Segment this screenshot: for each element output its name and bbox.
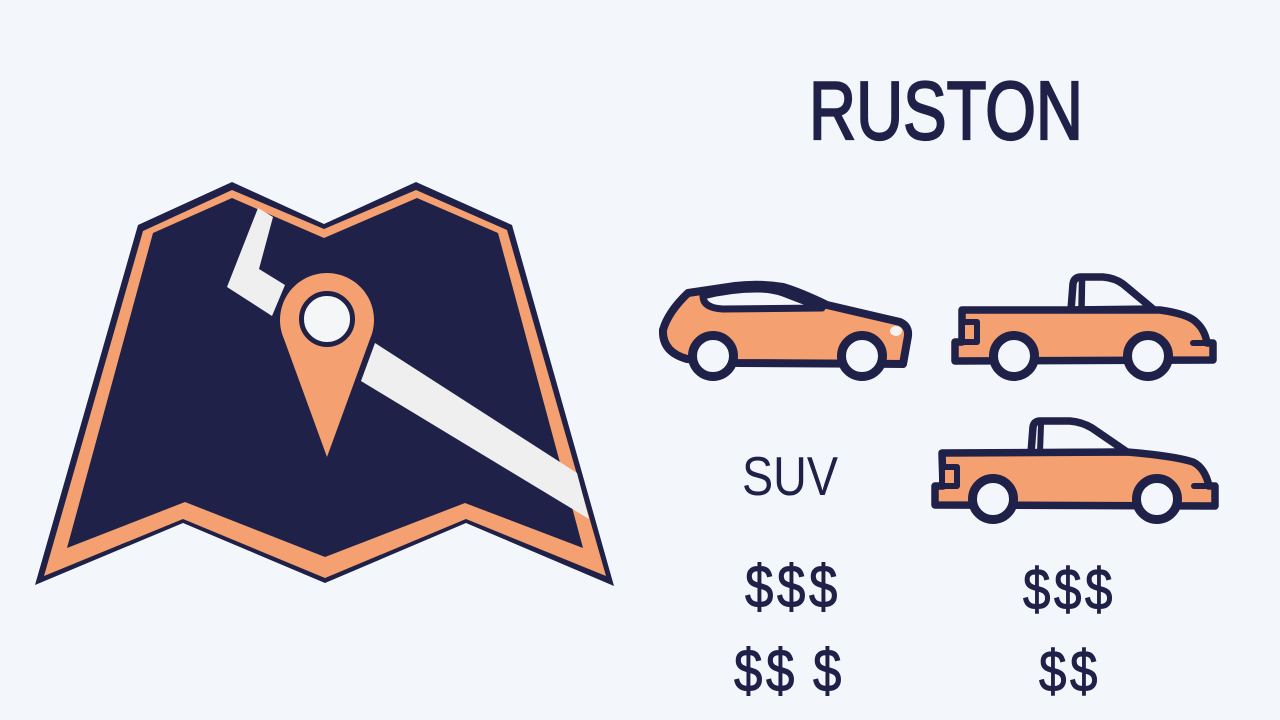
pickup tail light [962,322,977,342]
icon: pickup truck lower [935,421,1215,520]
price: left row one: $$$ [745,553,837,620]
pickup cab pillar [1078,281,1085,309]
title: RUSTON [809,64,1083,157]
map outer outline [35,182,614,586]
pin hole [302,294,352,344]
price: right row one: $$$ [1023,557,1113,622]
map orange border [44,190,606,578]
price: right row two: $$ [1039,639,1098,704]
car rear wheel [692,336,734,376]
road lower segment [361,343,589,519]
pickup rear wheel [994,336,1034,376]
SUV label: SUV [742,445,838,507]
pickup rear wheel [972,478,1014,520]
pickup cab window [1031,421,1127,453]
icon: pickup truck upper [955,277,1213,376]
pickup body [935,452,1215,506]
map illustration [35,182,614,586]
car headlight [890,326,902,336]
icon: location pin [280,273,374,457]
road upper segment [227,208,285,316]
pin body [280,273,374,457]
pickup front wheel [1128,336,1168,376]
car window [703,289,822,309]
car front wheel [842,336,882,376]
pickup front wheel [1136,478,1178,520]
pickup bumper line [1194,483,1215,489]
pickup body [955,310,1213,361]
car body [663,285,908,364]
price: left row two: $$ $ [734,637,841,704]
map navy face [67,198,583,557]
pickup cab window [1071,277,1153,310]
pickup cab pillar [1040,425,1041,452]
pickup bumper line [1193,340,1213,346]
pickup tail light [942,467,957,486]
icon: hatchback car [663,285,908,376]
